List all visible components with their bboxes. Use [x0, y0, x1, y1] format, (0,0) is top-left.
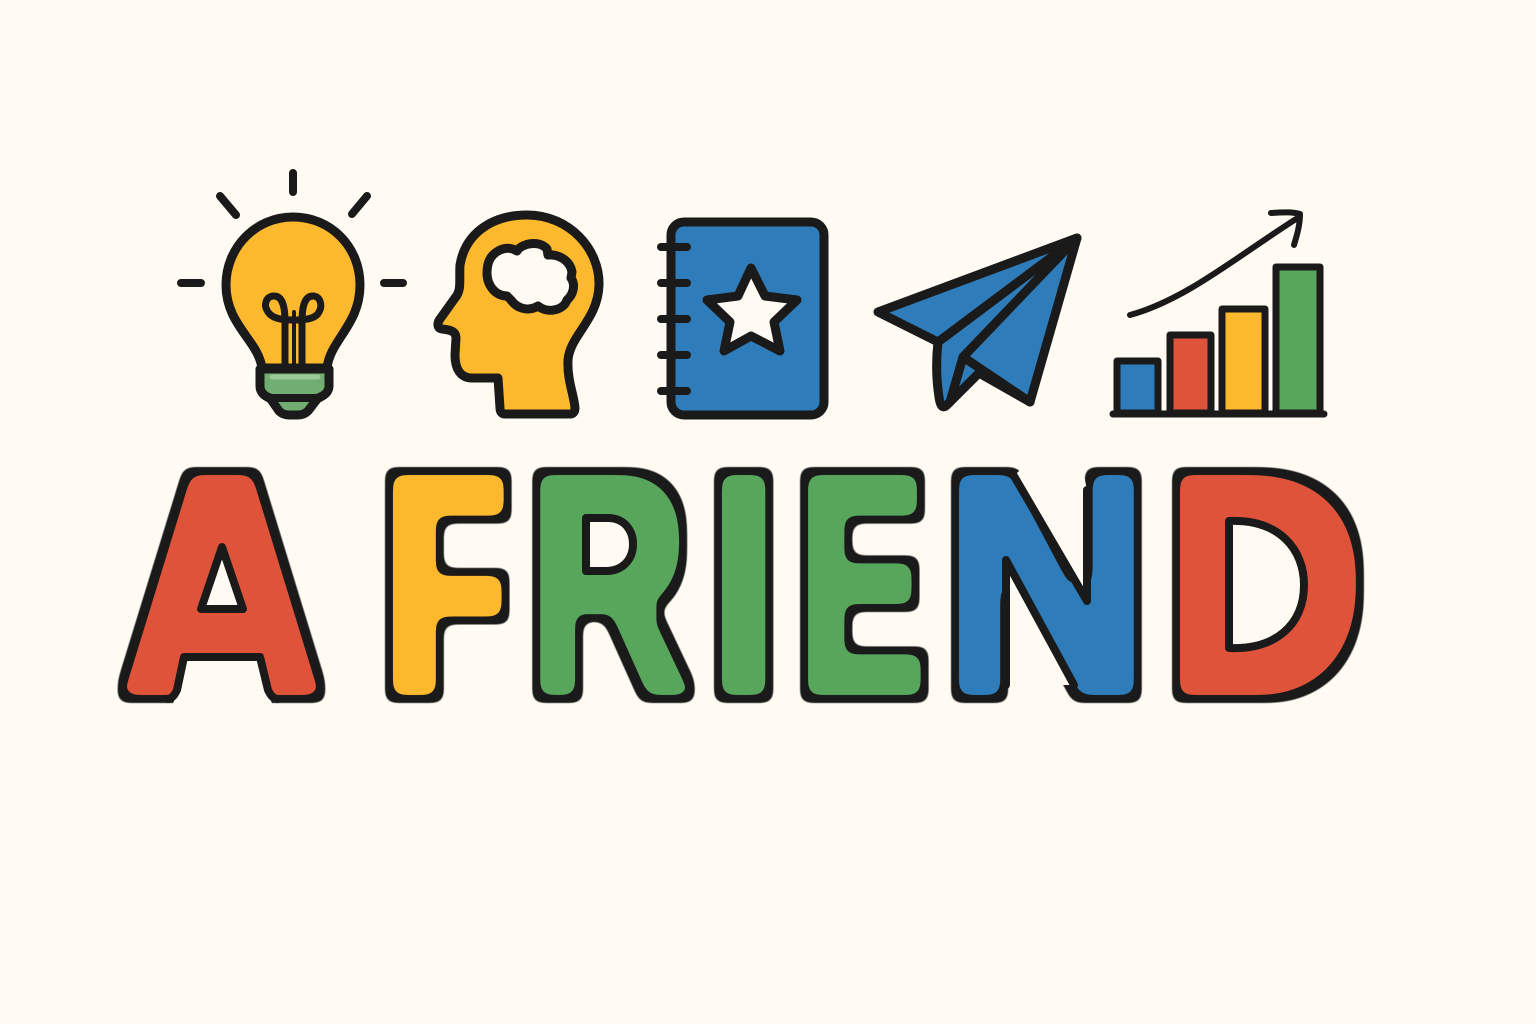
title: A FRIEND: F [388, 412, 502, 759]
icon: bar chart with rising arrow [1113, 212, 1324, 414]
icon: paper plane [878, 238, 1077, 407]
icon: light bulb [181, 173, 403, 415]
title: A FRIEND: E [801, 412, 923, 759]
icon: notebook with star [661, 222, 824, 415]
title: A FRIEND: A [127, 411, 316, 758]
title: A FRIEND: I [713, 410, 774, 758]
title: A FRIEND: N [942, 411, 1151, 758]
icon: head with brain [438, 215, 599, 414]
title: A FRIEND: D [1160, 411, 1369, 758]
title: A FRIEND: R [526, 410, 691, 758]
title: A FRIEND [127, 410, 1369, 759]
